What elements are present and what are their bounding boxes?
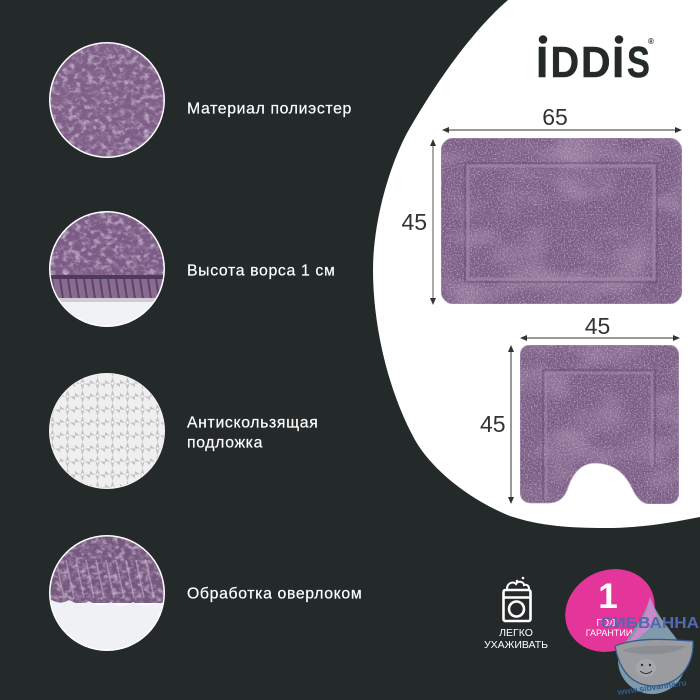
photo circle: pile height [49,211,165,328]
photo circle: overlock edging [49,535,165,652]
logo: IDDIS: I [536,38,548,87]
watermark: Sibvanna: www.sibvanna.ru [616,677,687,697]
warranty badge: ГОД [596,618,616,629]
photo circle: material [49,42,165,158]
label: anti-slip backing: подложка [187,434,263,452]
rectangular bath mat [441,138,682,304]
dimensions: toilet mat [480,313,680,504]
logo: IDDIS: ® [648,37,654,46]
dimensions: rectangular mat: 45 [402,209,427,235]
warranty badge [551,554,669,667]
label: pile height: Высота ворса 1 см [187,262,335,280]
warranty badge: ГАРАНТИИ [586,628,632,638]
logo: IDDIS: S [627,38,650,87]
photo circle: anti-slip backing [49,373,165,489]
label: easy care: ЛЕГКО [499,627,533,639]
logo: IDDIS: D [581,39,611,87]
dimensions: rectangular mat: 65 [542,104,568,130]
logo: IDDIS: I [612,38,624,87]
logo: IDDIS: D [550,37,579,86]
label: easy care [484,627,548,651]
dimensions: rectangular mat [402,104,682,305]
dimensions: toilet mat: 45 [480,411,506,437]
white curved panel [373,0,700,528]
dimensions: toilet mat: 45 [585,313,610,339]
label: overlock edging: Обработка оверлоком [187,586,362,602]
label: material: Материал полиэстер [187,100,352,118]
toilet mat with cut-out [520,345,679,504]
icon: washing machine [504,577,530,621]
watermark: Sibvanna [601,597,699,697]
logo: IDDIS [536,35,654,87]
warranty badge: 1 [598,577,618,616]
label: anti-slip backing: Антискользящая [187,414,318,432]
watermark: Sibvanna: СИБВАННА [601,615,699,632]
label: easy care: УХАЖИВАТЬ [484,639,548,651]
label: anti-slip backing [187,414,318,452]
